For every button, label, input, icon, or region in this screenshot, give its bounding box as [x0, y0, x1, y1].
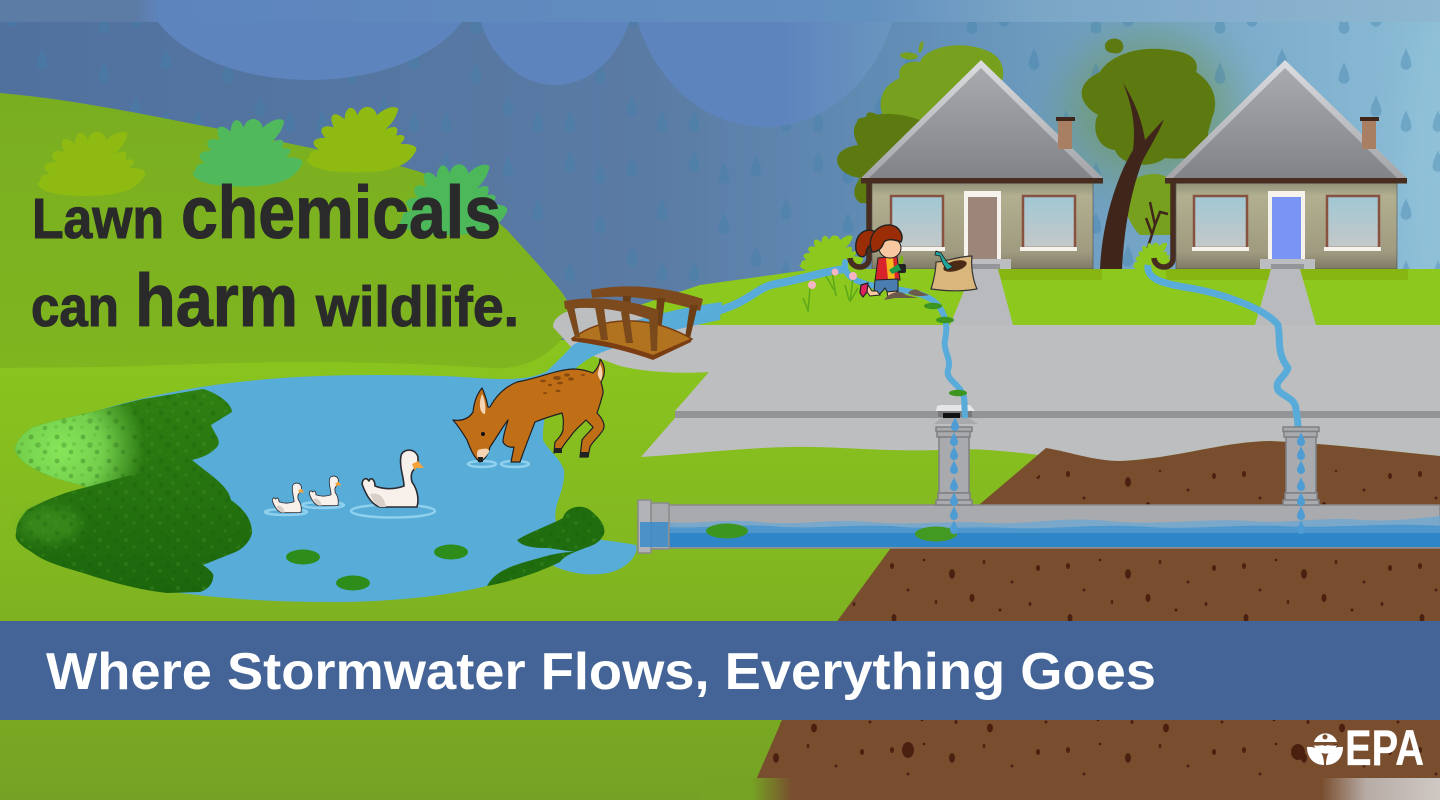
window left — [1192, 196, 1249, 251]
pipe water: deep layer — [668, 533, 1440, 547]
sidewalk — [641, 418, 1440, 461]
right gutter downspout — [1154, 183, 1173, 267]
window right — [1324, 196, 1381, 251]
step — [962, 259, 1011, 269]
pipe algae 1 — [706, 524, 748, 538]
deer spots — [540, 373, 585, 394]
back rail — [591, 286, 703, 311]
duckling 2 — [309, 476, 341, 506]
tree leaves left — [857, 110, 881, 126]
algae on lawn 2 — [936, 317, 954, 323]
curb — [675, 411, 1440, 418]
face — [879, 238, 901, 258]
collar water — [640, 522, 668, 547]
fascia — [1165, 178, 1407, 184]
tree: small bare tree — [1146, 202, 1168, 250]
lawn — [600, 269, 1440, 330]
window left — [880, 196, 945, 251]
headline: wildlife. — [315, 275, 519, 339]
leg front — [887, 291, 897, 297]
catch basin grate — [934, 405, 978, 424]
step — [1260, 259, 1315, 269]
tree: light green upper left — [881, 45, 1003, 150]
fertilizer bag — [931, 251, 977, 291]
wall — [872, 183, 1093, 269]
soil above pipe — [973, 441, 1440, 510]
lawn shadow under house left — [998, 269, 1102, 280]
hill — [0, 93, 571, 368]
road and path — [553, 305, 1440, 411]
clouds — [145, 0, 900, 127]
scoop — [935, 251, 953, 270]
algae mat left — [15, 389, 252, 593]
roof — [861, 60, 1103, 178]
trees behind the houses — [837, 39, 1215, 269]
bridge — [564, 286, 703, 360]
chimney — [1360, 117, 1379, 149]
pipe water: light layer — [668, 516, 1440, 547]
haze: around central tree — [1065, 35, 1235, 185]
deer muzzle — [477, 449, 489, 461]
algae on lawn 1 — [924, 303, 942, 309]
leg back — [864, 285, 880, 296]
stream into pond — [520, 302, 722, 400]
soil mounds — [884, 290, 929, 300]
storm drain column right — [1283, 427, 1319, 505]
deer eye — [481, 432, 485, 436]
door — [964, 191, 1001, 261]
shoe — [860, 283, 868, 297]
top band — [0, 0, 1440, 22]
storm pipe — [638, 500, 1440, 553]
headline: harm — [135, 259, 298, 342]
deck — [573, 321, 692, 358]
stream to bridge — [710, 269, 845, 313]
house: right — [1165, 60, 1407, 269]
banner: Where Stormwater Flows, Everything Goes — [46, 643, 1156, 701]
ground — [0, 340, 1440, 800]
headline: can — [31, 275, 119, 339]
deer hooves — [478, 448, 589, 462]
back posts — [622, 296, 698, 338]
duck: adult — [362, 450, 424, 507]
tree: dark green left — [837, 114, 925, 205]
ripples — [265, 461, 529, 518]
sky background — [0, 0, 1440, 400]
front rail — [564, 298, 659, 322]
house: left — [861, 60, 1103, 269]
stream from left gutter to drain — [845, 262, 965, 420]
window right — [1020, 196, 1077, 251]
deer ear inner — [480, 394, 485, 414]
drops falling right — [1297, 432, 1305, 534]
headline: chemicals — [181, 171, 501, 254]
shirt — [875, 256, 900, 281]
tree: central trunk — [1100, 83, 1164, 269]
headline — [31, 171, 519, 342]
tree: central canopy tuft — [1105, 39, 1123, 53]
duckling 1 — [272, 483, 304, 513]
soil below pipe — [756, 545, 1440, 780]
tree: central canopy — [1082, 49, 1215, 165]
haze: right edge — [1405, 0, 1440, 340]
pipe algae 2 — [915, 526, 957, 542]
walkway left — [950, 269, 1013, 325]
tree: small light green behind — [1124, 174, 1172, 235]
drops falling left — [950, 417, 959, 534]
soil speckles — [758, 470, 1440, 780]
road stream into drain — [964, 396, 965, 418]
bottom band — [700, 778, 1440, 800]
bushes on hill — [37, 107, 507, 235]
bush by left house — [799, 235, 863, 273]
rain drops — [0, 22, 1440, 362]
deer — [453, 359, 604, 462]
chimney — [1056, 117, 1075, 149]
shorts — [874, 279, 898, 294]
roof — [1165, 60, 1407, 178]
hair — [870, 225, 902, 252]
door — [1268, 191, 1305, 261]
banner — [0, 621, 1440, 720]
shirt stripe — [886, 257, 895, 280]
lily pads in pond — [286, 544, 468, 590]
stream from right gutter to drain — [1148, 265, 1298, 427]
deer tail inner — [598, 364, 602, 381]
gloves and plant pot — [889, 255, 906, 274]
bush by right house — [1133, 243, 1174, 272]
collar wide — [651, 503, 669, 549]
wall — [1176, 183, 1397, 269]
walkway right — [1255, 269, 1316, 325]
fascia — [861, 178, 1103, 184]
deck rim — [571, 338, 692, 360]
algae on road — [949, 390, 967, 396]
front posts — [566, 306, 658, 351]
ponytail — [856, 230, 876, 257]
girl planting — [856, 225, 906, 297]
left gutter downspout — [850, 183, 869, 267]
flowers — [803, 268, 858, 312]
bag soil — [942, 258, 968, 274]
pipe body — [668, 505, 1440, 548]
collar end — [638, 500, 651, 553]
algae mat right — [487, 507, 604, 586]
tree leaves top — [900, 41, 924, 60]
EPA logo — [1307, 720, 1424, 776]
storm drain column left — [936, 427, 972, 505]
large soil stones — [902, 742, 1305, 760]
pond — [100, 372, 637, 602]
logo icon — [1307, 733, 1343, 765]
headline: Lawn — [32, 187, 164, 251]
pipe water: mid layer — [668, 525, 1440, 547]
lawn shadow under house right — [1166, 269, 1408, 280]
